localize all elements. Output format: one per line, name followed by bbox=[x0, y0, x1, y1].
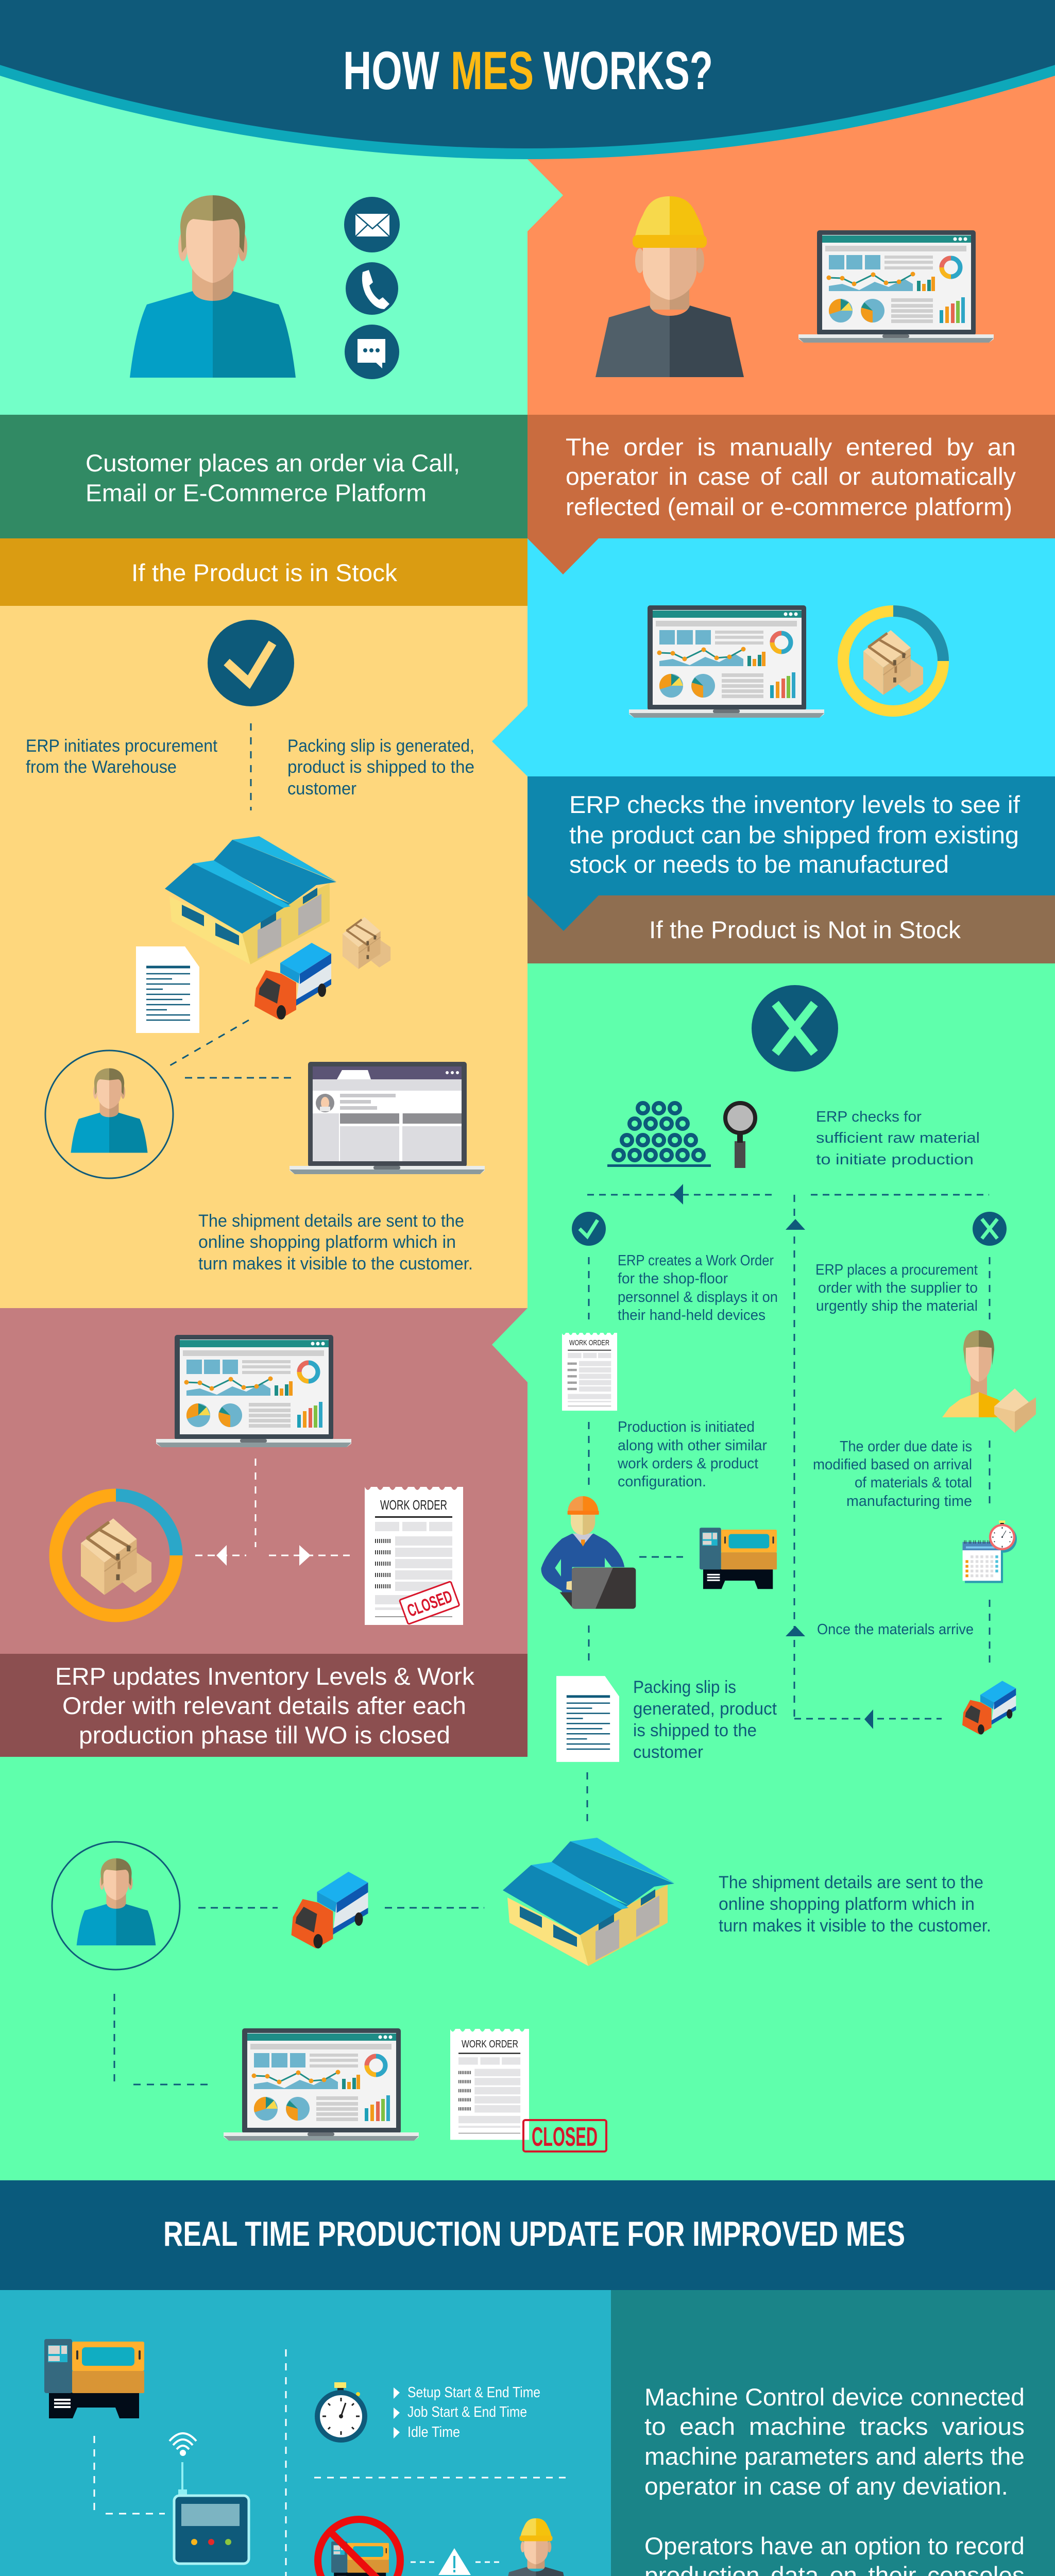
text: shipment details: online shopping platform which in bbox=[198, 1232, 456, 1252]
title: HOW bbox=[343, 41, 439, 101]
text: packing slip: product is shipped to the bbox=[287, 757, 474, 777]
icon: supplier with box bbox=[942, 1330, 1036, 1433]
arrow: dashed right branch bbox=[811, 1194, 989, 1195]
icon: closed work order: WORK ORDER bbox=[380, 1497, 447, 1513]
arrow: dashed breakdown to alert bbox=[411, 2562, 503, 2563]
arrow: dashed truck to packing slip bbox=[794, 1709, 942, 1729]
panel: machine control description: Machine Control device connected bbox=[644, 2383, 1025, 2411]
text: due date: modified based on arrival bbox=[813, 1456, 972, 1473]
title: WORKS? bbox=[543, 41, 713, 101]
icon: operator with hard hat bbox=[595, 196, 744, 377]
text: tracked times bbox=[394, 2384, 540, 2441]
text: raw material check: ERP checks for bbox=[816, 1109, 922, 1125]
text: production initiated: Production is initiated bbox=[618, 1419, 755, 1435]
heading: not in stock bbox=[528, 895, 1055, 963]
arrow: inventory banner pointer bbox=[528, 895, 599, 931]
text: production initiated: configuration. bbox=[618, 1473, 706, 1490]
text: procurement: ERP initiates procurement bbox=[26, 736, 218, 756]
banner: customer order text bbox=[0, 415, 528, 538]
text: raw material check: sufficient raw material bbox=[816, 1130, 980, 1146]
text: work order creation: personnel & displays it on bbox=[618, 1289, 778, 1306]
text: materials arrive: Once the materials arrive bbox=[817, 1621, 974, 1638]
arrow: dashed laptop to row bbox=[254, 1459, 257, 1547]
arrow: dashed truck to customer bbox=[170, 1020, 249, 1065]
header band bbox=[0, 0, 1055, 159]
icon: small work order: WORK ORDER bbox=[569, 1338, 609, 1347]
icon: closed work order: CLOSED bbox=[532, 2122, 598, 2152]
panel: machine control bbox=[0, 2290, 611, 2576]
text: work order creation bbox=[618, 1252, 778, 1324]
icon: laptop dashboard bbox=[156, 1335, 351, 1447]
arrow: dashed left branch bbox=[587, 1184, 777, 1205]
panel: machine control description: operator in case of any deviation. bbox=[644, 2472, 1008, 2500]
title bbox=[343, 41, 713, 101]
title: MES bbox=[451, 41, 534, 101]
icon: customer in circle bbox=[45, 1050, 173, 1178]
arrow: dashed divider vertical bbox=[285, 2349, 286, 2576]
icon: closed work order: CLOSED bbox=[405, 1587, 455, 1621]
icon: customer in circle bbox=[52, 1842, 180, 1970]
icon: boxes bbox=[343, 917, 390, 969]
arrow: dashed worker to machine bbox=[639, 1556, 683, 1558]
icon: small check bbox=[572, 1212, 606, 1246]
banner: inventory text: stock or needs to be manufactured bbox=[569, 851, 949, 878]
arrow: left column dashes bbox=[588, 1257, 589, 1667]
icon: cross bbox=[752, 985, 838, 1072]
icon: closed work order bbox=[450, 2027, 606, 2152]
text: shipment details bbox=[719, 1873, 991, 1936]
text: packing slip: generated, product bbox=[633, 1699, 777, 1719]
icon: packing slip document bbox=[136, 946, 199, 1033]
panel: ERP updates inventory bbox=[0, 1308, 528, 1757]
icon: closed work order: WORK ORDER bbox=[462, 2039, 518, 2050]
icon: online shopping laptop bbox=[290, 1062, 485, 1174]
text: due date bbox=[813, 1438, 972, 1510]
banner: ERP update text: ERP updates Inventory Levels & Work bbox=[55, 1663, 475, 1690]
text: shipment details bbox=[198, 1211, 473, 1274]
heading: in stock: If the Product is in Stock bbox=[131, 559, 397, 586]
icon: check bbox=[208, 620, 294, 706]
arrow: right column dashes bbox=[989, 1257, 990, 1663]
panel: machine control description bbox=[611, 2290, 1055, 2576]
text: tracked times: Idle Time bbox=[407, 2424, 460, 2441]
panel: machine control description: machine parameters and alerts the bbox=[644, 2443, 1025, 2470]
banner: ERP update text: production phase till WO is closed bbox=[79, 1721, 450, 1749]
icon: calendar and clock bbox=[963, 1520, 1017, 1583]
arrow: dashed truck to warehouse bbox=[385, 1907, 484, 1908]
text: packing slip: Packing slip is generated, bbox=[287, 736, 474, 756]
text: procurement order bbox=[815, 1262, 978, 1314]
text: work order creation: their hand-held devices bbox=[618, 1307, 765, 1324]
text: production initiated: work orders & product bbox=[617, 1455, 758, 1472]
icon: machine breakdown bbox=[318, 2519, 400, 2576]
icon: machine bbox=[700, 1528, 777, 1589]
icon: worker at laptop bbox=[541, 1496, 636, 1609]
text: procurement: from the Warehouse bbox=[26, 757, 177, 777]
icon: laptop dashboard bbox=[798, 230, 994, 343]
text: procurement order: order with the supplier to bbox=[818, 1280, 978, 1296]
arrow: dashed split bbox=[250, 723, 251, 810]
banner: order entry text: The order is manually entered by an bbox=[566, 433, 1016, 461]
arrow: dashed to donut bbox=[195, 1545, 246, 1566]
arrow: dashed separator bbox=[314, 2477, 571, 2478]
panel: customer places order bbox=[0, 52, 563, 538]
icon: laptop dashboard bbox=[224, 2028, 419, 2141]
text: due date: of materials & total bbox=[855, 1475, 972, 1491]
icon: truck bbox=[292, 1872, 368, 1948]
icon: truck bbox=[254, 943, 331, 1020]
text: production initiated bbox=[617, 1419, 767, 1490]
icon: packing slip document bbox=[556, 1676, 619, 1762]
panel: product in stock bbox=[0, 538, 528, 1308]
icon: machine bbox=[44, 2339, 144, 2418]
text: production initiated: along with other similar bbox=[618, 1437, 767, 1454]
text: due date: The order due date is bbox=[840, 1438, 972, 1455]
icon: closed work order bbox=[365, 1484, 463, 1625]
panel: product not in stock bbox=[0, 963, 1055, 2180]
text: packing slip: Packing slip is bbox=[633, 1677, 736, 1697]
icon: truck bbox=[962, 1681, 1016, 1735]
text: due date: manufacturing time bbox=[846, 1493, 972, 1510]
banner: ERP update text: Order with relevant details after each bbox=[62, 1692, 466, 1719]
arrow: dashed machine to device bbox=[94, 2436, 165, 2514]
arrow: dashed customer to truck bbox=[198, 1907, 278, 1908]
banner: order entry text: reflected (email or e-commerce platform) bbox=[566, 493, 1012, 520]
text: shipment details: turn makes it visible to the customer. bbox=[198, 1254, 473, 1274]
banner: customer order text: Email or E-Commerce Platform bbox=[86, 479, 427, 506]
banner: inventory text: the product can be shipped from existing bbox=[569, 821, 1019, 849]
text: shipment details: turn makes it visible to the customer. bbox=[719, 1916, 991, 1936]
icon: magnifier bbox=[725, 1103, 755, 1168]
banner: order entry text bbox=[528, 415, 1055, 538]
icon: inventory donut bbox=[56, 1495, 176, 1616]
icon: email bbox=[344, 197, 400, 252]
icon: wifi signal bbox=[169, 2433, 196, 2455]
text: packing slip: is shipped to the bbox=[633, 1721, 757, 1740]
text: procurement order: urgently ship the material bbox=[816, 1298, 978, 1314]
icon: small work order bbox=[562, 1332, 617, 1411]
icon: warning bbox=[438, 2548, 471, 2575]
banner: order entry text: operator in case of call or automatically bbox=[566, 463, 1016, 490]
text: tracked times: Setup Start & End Time bbox=[407, 2384, 540, 2401]
text: tracked times: Job Start & End Time bbox=[407, 2404, 527, 2420]
arrow: dashed to work order bbox=[269, 1545, 350, 1566]
text: shipment details: The shipment details are sent to the bbox=[719, 1873, 983, 1892]
text: shipment details: The shipment details are sent to the bbox=[198, 1211, 464, 1231]
text: work order creation: for the shop-floor bbox=[618, 1270, 728, 1287]
icon: stopwatch bbox=[315, 2382, 367, 2443]
text: work order creation: ERP creates a Work Order bbox=[618, 1252, 774, 1269]
panel: machine control description: Operators have an option to record bbox=[644, 2532, 1025, 2560]
text: procurement bbox=[26, 736, 218, 777]
banner: ERP update text bbox=[0, 1654, 528, 1757]
arrow: dashed customer to laptop bbox=[114, 1994, 212, 2084]
text: packing slip: customer bbox=[633, 1742, 703, 1762]
heading: real time production update bbox=[0, 2180, 1055, 2290]
text: packing slip bbox=[633, 1677, 777, 1762]
banner: inventory text: ERP checks the inventory levels to see if bbox=[569, 791, 1020, 818]
icon: warehouse bbox=[503, 1838, 674, 1966]
icon: machine control device bbox=[174, 2462, 249, 2564]
icon: small cross bbox=[973, 1212, 1007, 1246]
panel: operator enters order bbox=[528, 52, 1055, 538]
icon: laptop dashboard bbox=[629, 605, 824, 718]
text: shipment details: online shopping platform which in bbox=[719, 1894, 975, 1914]
banner: inventory text bbox=[528, 776, 1055, 895]
arrow: order banner pointer bbox=[528, 538, 599, 574]
heading: not in stock: If the Product is Not in Stock bbox=[649, 916, 961, 943]
arrow: dashed slip to warehouse bbox=[586, 1772, 588, 1825]
icon: raw material stack bbox=[607, 1103, 711, 1167]
icon: stock donut bbox=[843, 611, 943, 711]
arrow: central dashed vertical bbox=[786, 1195, 805, 1719]
icon: chat bbox=[345, 325, 399, 379]
text: packing slip: customer bbox=[287, 779, 356, 799]
heading: in stock bbox=[0, 538, 528, 606]
arrow: dashed customer to platform bbox=[185, 1077, 296, 1079]
text: raw material check: to initiate production bbox=[816, 1151, 974, 1168]
text: procurement order: ERP places a procurement bbox=[815, 1262, 978, 1278]
panel: machine control description: to each machine tracks various bbox=[644, 2413, 1025, 2440]
panel: inventory check bbox=[492, 538, 1055, 895]
icon: phone bbox=[346, 262, 398, 315]
icon: warehouse bbox=[165, 836, 336, 964]
icon: operator bbox=[503, 2518, 569, 2576]
text: raw material check bbox=[816, 1109, 980, 1168]
icon: customer bbox=[130, 195, 296, 378]
text: packing slip bbox=[287, 736, 474, 799]
banner: customer order text: Customer places an order via Call, bbox=[86, 449, 460, 477]
